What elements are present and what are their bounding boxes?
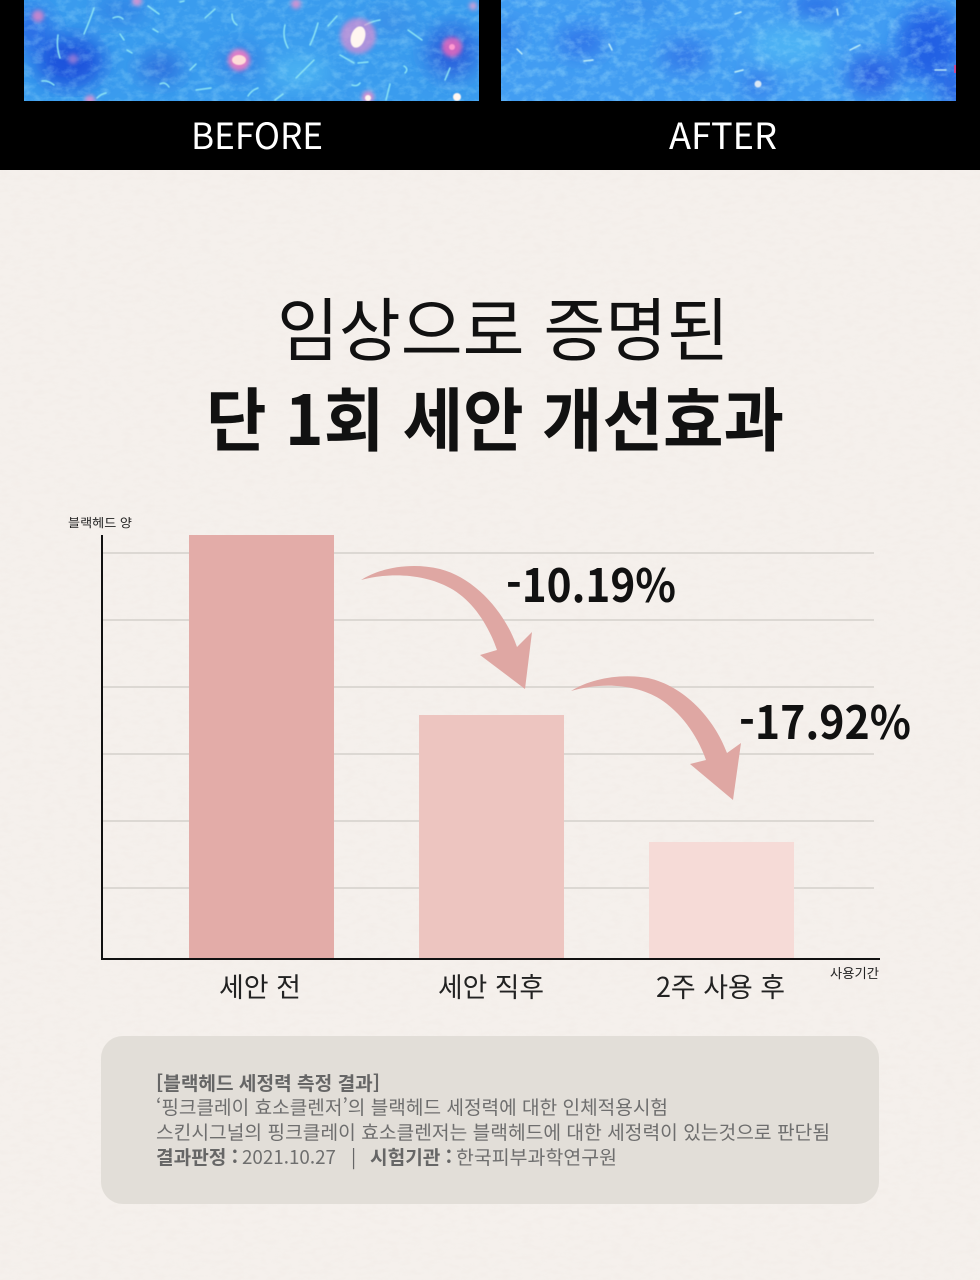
note line 3: 결과판정 : — [156, 1143, 238, 1170]
note line 3: | — [351, 1143, 356, 1170]
y axis label: 블랙헤드 양 — [68, 514, 132, 531]
label: before: BEFORE — [191, 108, 323, 160]
note line 3 — [156, 1143, 617, 1170]
bar: before cleansing — [189, 535, 334, 959]
bar chart — [68, 514, 911, 1005]
label: after: AFTER — [669, 108, 777, 160]
note heading: [블랙헤드 세정력 측정 결과] — [156, 1069, 380, 1096]
x axis title: 사용기간 — [830, 963, 879, 982]
note line 1: ‘핑크클레이 효소클렌저’의 블랙헤드 세정력에 대한 인체적용시험 — [156, 1093, 668, 1120]
category label 3: 2주 사용 후 — [656, 966, 785, 1005]
photo: after skin microscope image — [501, 0, 956, 101]
title — [206, 275, 784, 465]
arrow: second drop — [571, 676, 741, 800]
chart axes — [102, 535, 880, 959]
category label 2: 세안 직후 — [438, 966, 544, 1005]
category label 1: 세안 전 — [219, 966, 301, 1005]
note line 3: 시험기관 : — [370, 1143, 452, 1170]
panel: test result note — [101, 1036, 879, 1204]
value: second drop: -17.92% — [739, 687, 911, 753]
arrow: first drop — [361, 566, 532, 689]
note line 2: 스킨시그널의 핑크클레이 효소클렌저는 블랙헤드에 대한 세정력이 있는것으로 판단됨 — [156, 1118, 830, 1145]
title: 임상으로 증명된 — [277, 275, 729, 375]
bar: after 2 weeks — [649, 842, 794, 959]
note line 3: 2021.10.27 — [242, 1143, 336, 1170]
photo: before skin microscope image — [12, 0, 479, 105]
black photo band — [0, 0, 980, 170]
note line 3: 한국피부과학연구원 — [456, 1143, 617, 1170]
bar: right after cleansing — [419, 715, 564, 959]
value: first drop: -10.19% — [506, 550, 676, 616]
title: 단 1회 세안 개선효과 — [206, 365, 784, 465]
